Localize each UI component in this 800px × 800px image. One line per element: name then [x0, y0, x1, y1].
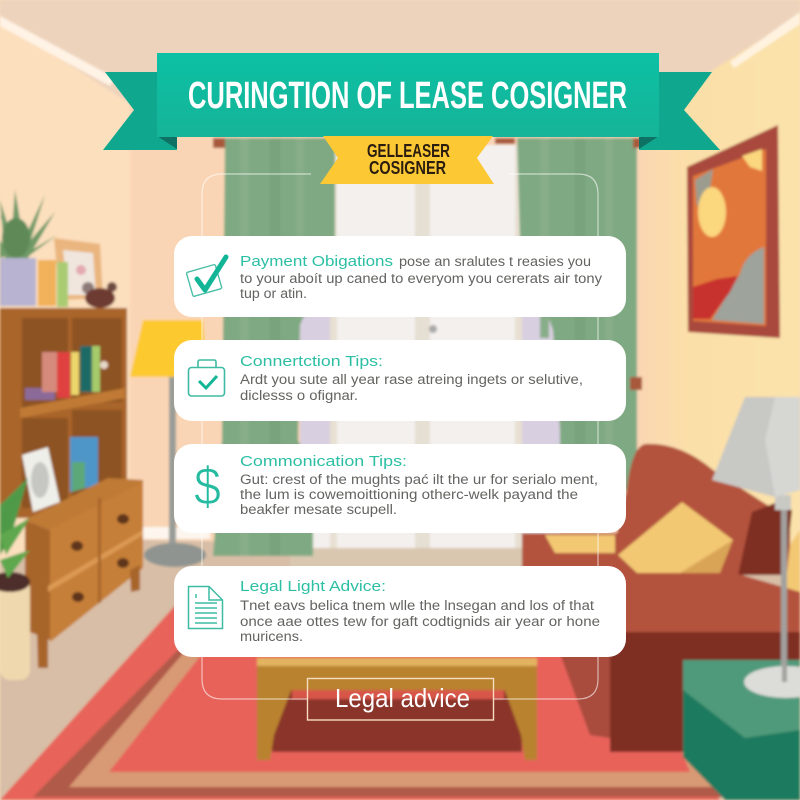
floor [0, 540, 800, 800]
card: connection tips [174, 340, 626, 421]
green ottoman [683, 660, 800, 800]
subtitle ribbon [320, 136, 494, 184]
body text [240, 254, 602, 301]
icon: document [188, 586, 222, 628]
button label: Legal advice [335, 683, 470, 713]
heading: Commonication Tips: [240, 453, 407, 470]
card: payment obligations [174, 236, 626, 317]
decorative outline frame [202, 174, 598, 699]
card: legal light advice [174, 566, 626, 657]
body text: diclesss o ofignar. [240, 388, 358, 403]
floor lamp left [130, 320, 207, 567]
yellow ribbon shape [320, 136, 494, 184]
ribbon tail left [103, 72, 177, 150]
rug [0, 600, 735, 800]
left wall [0, 0, 135, 700]
curtain rod ends and tie back [213, 138, 642, 390]
baseboard [140, 527, 210, 539]
curtain right [517, 138, 637, 490]
ceiling [0, 0, 800, 110]
body text: to your aboít up caned to everyom you cererats air tony [240, 271, 602, 286]
heading: Payment Obigations [240, 253, 393, 270]
body text: muricens. [240, 629, 303, 644]
bookshelf [0, 308, 127, 518]
cornice right [730, 12, 800, 68]
ribbon fold right [639, 136, 659, 149]
legal advice button [308, 678, 494, 720]
ribbon tail right [639, 72, 720, 150]
icon: briefcase with check [188, 360, 224, 396]
shelf top decor [0, 238, 117, 308]
cornice left [0, 16, 115, 86]
potted plant on shelf [0, 190, 57, 258]
icon: dollar sign: $ [194, 457, 221, 517]
dresser [25, 478, 143, 668]
back wall [130, 60, 645, 560]
body text: Ardt you sute all year rase atreing ingets or selutive, [240, 372, 583, 387]
body text: pose an sralutes t reasies you [399, 254, 591, 269]
subtitle line 2: COSIGNER [369, 157, 446, 178]
potted plant bottom left [0, 478, 30, 680]
body text: the lum is cowemoittioning otherc-welk payand the [240, 487, 578, 502]
table lamp right [712, 397, 800, 698]
heading: Connertction Tips: [240, 353, 383, 370]
body text: once aae ottes tew for gaft codtignids air year or hone [240, 614, 600, 629]
subtitle line 1: GELLEASER [367, 140, 450, 161]
window [290, 145, 562, 568]
body text: beakfer mesate scupell. [240, 502, 397, 517]
body text: Gut: crest of the mughts pać ilt the ur for serialo ment, [240, 472, 598, 487]
body text: tup or atin. [240, 286, 307, 301]
body text: Tnet eavs belica tnem wlle the lnsegan and los of that [240, 598, 594, 613]
body text [240, 472, 598, 517]
title banner ribbon [103, 53, 720, 150]
body text [240, 598, 600, 644]
icon: checkmark on paper [186, 257, 226, 297]
ribbon fold left [157, 136, 177, 149]
painting [687, 125, 780, 338]
right wall [640, 0, 800, 700]
body text [240, 372, 583, 403]
coffee table [257, 658, 537, 760]
curtain left [213, 138, 335, 556]
sofa [522, 444, 800, 752]
heading: Legal Light Advice: [240, 578, 386, 595]
ribbon body [157, 53, 659, 137]
card: communication tips [174, 444, 626, 533]
